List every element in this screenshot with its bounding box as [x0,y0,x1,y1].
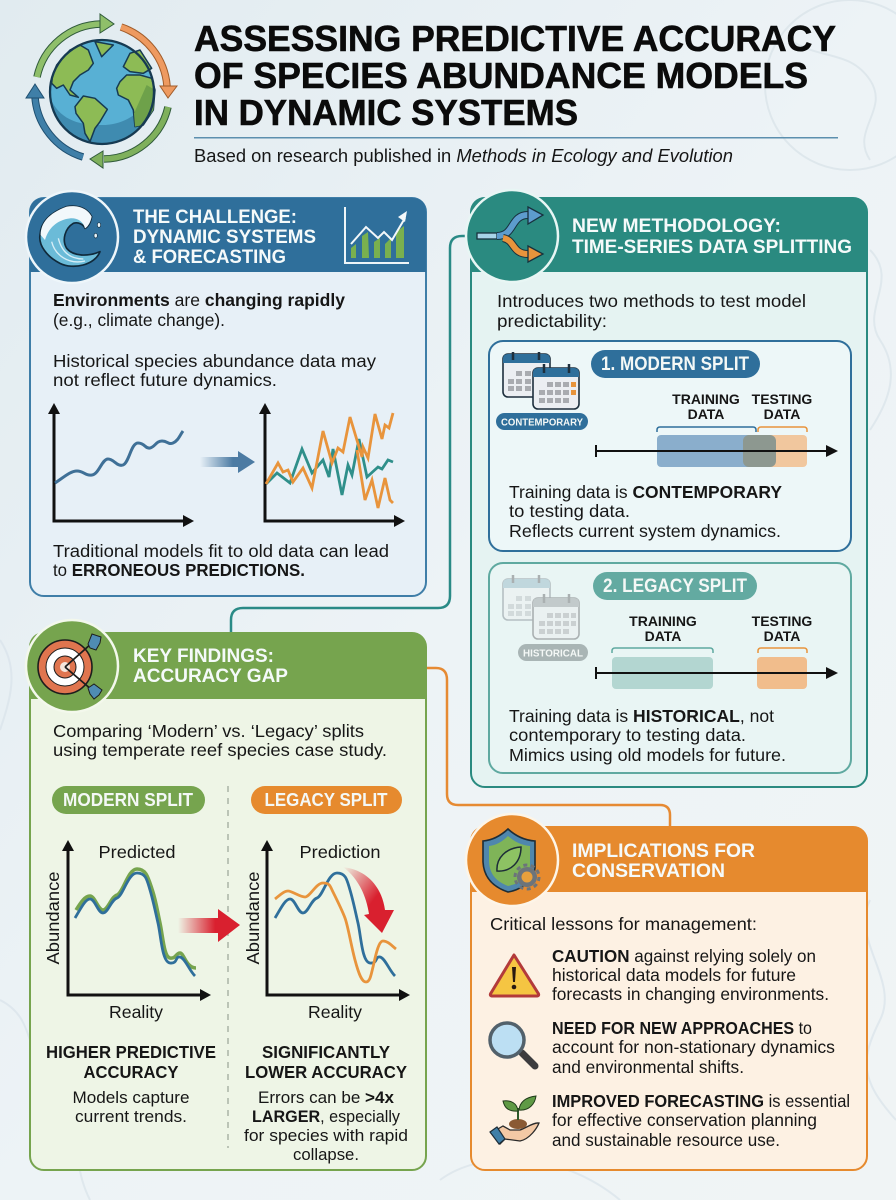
methodology intro: predictability: [497,311,607,331]
legacy split pill [593,572,757,600]
challenge heading [133,206,316,268]
abundance label: Abundance [43,872,63,964]
arrow: modern to legacy [178,909,240,942]
icon: warning triangle [490,955,539,996]
challenge conclusion: to ERRONEOUS PREDICTIONS. [53,560,305,580]
connector: findings to implications [426,668,670,828]
legacy split pill: LEGACY SPLIT [264,790,388,810]
modern split pill: 1. MODERN SPLIT [601,354,749,375]
modern outcome text: Models capture [72,1089,190,1107]
caution text: historical data models for future [552,965,796,985]
findings heading: KEY FINDINGS: [133,645,274,667]
modern split text: to testing data. [509,501,630,521]
historical label: HISTORICAL [523,648,584,660]
implications icon: shield [466,814,558,906]
chart: volatile trend [259,403,405,527]
challenge header [30,198,426,272]
connector: challenge to methodology to findings [231,236,466,634]
modern outcome text: HIGHER PREDICTIVE [46,1042,216,1062]
title: OF SPECIES ABUNDANCE MODELS [194,55,808,96]
caution text: CAUTION against relying solely on [552,946,816,966]
icon: magnifying glass [490,1023,535,1066]
panel: key findings [26,620,426,1170]
challenge text: (e.g., climate change). [53,310,225,330]
challenge icon: wave [26,191,118,283]
legacy outcome text: LARGER, especially [252,1108,401,1126]
chart: stable trend [48,403,194,527]
legacy split pill [251,786,402,814]
challenge text: Historical species abundance data may [53,351,376,371]
challenge text: not reflect future dynamics. [53,370,277,390]
caution text: forecasts in changing environments. [552,984,829,1004]
improved forecasting text: and sustainable resource use. [552,1130,780,1150]
challenge conclusion: Traditional models fit to old data can lead [53,541,389,561]
legacy split text: Mimics using old models for future. [509,745,786,765]
modern split text: Reflects current system dynamics. [509,521,781,541]
findings heading: ACCURACY GAP [133,665,288,687]
icon: contemporary calendars [503,352,579,409]
methodology icon: split arrows [466,190,558,282]
legacy split timeline [596,613,838,689]
legacy outcome text [244,1042,408,1164]
findings heading [133,645,288,687]
legacy outcome text: Errors can be >4x [258,1089,395,1107]
modern outcome text [46,1042,216,1126]
legacy split timeline: DATA [764,628,800,644]
legacy outcome text: for species with rapid [244,1127,408,1145]
challenge text [53,290,376,390]
methodology heading [572,215,852,258]
modern split timeline: TRAINING [672,391,740,407]
reality label: Reality [308,1002,362,1022]
modern split pill: MODERN SPLIT [63,790,193,810]
new approaches text [552,1018,835,1077]
legacy split pill: 2. LEGACY SPLIT [603,576,747,597]
legacy split text: contemporary to testing data. [509,725,746,745]
reality label: Reality [109,1002,163,1022]
prediction label: Prediction [300,842,380,862]
methodology heading: TIME-SERIES DATA SPLITTING [572,236,852,258]
icon: historical calendars [503,575,579,639]
legacy split timeline: DATA [645,628,681,644]
chart: legacy split [243,840,410,1022]
findings intro [53,721,387,760]
improved forecasting text [552,1091,850,1150]
methodology intro [497,291,806,331]
modern outcome text: ACCURACY [84,1062,179,1082]
modern split timeline: DATA [688,406,724,422]
panel: new methodology [466,190,867,787]
modern split pill [591,350,760,378]
methodology header [471,198,867,272]
icon: globe with cycle arrows [26,14,177,168]
legacy outcome text: LOWER ACCURACY [245,1062,407,1082]
legacy outcome text: collapse. [293,1146,359,1164]
methodology intro: Introduces two methods to test model [497,291,806,311]
caution text [552,946,829,1004]
new approaches text: NEED FOR NEW APPROACHES to [552,1018,812,1038]
challenge conclusion [53,541,389,580]
chart: modern split [43,840,211,1022]
findings header [30,633,426,699]
title [194,18,836,133]
implications header [471,827,867,892]
modern split timeline: DATA [764,406,800,422]
improved forecasting text: IMPROVED FORECASTING is essential [552,1091,850,1111]
findings intro: Comparing ‘Modern’ vs. ‘Legacy’ splits [53,721,364,741]
findings icon: target [26,620,118,712]
implications heading [572,840,755,882]
challenge heading: THE CHALLENGE: [133,206,297,228]
arrow: trend to volatile [200,451,255,473]
improved forecasting text: for effective conservation planning [552,1110,817,1130]
curved red arrow [343,867,394,933]
implications heading: CONSERVATION [572,860,725,882]
modern split text [509,482,782,541]
panel: implications [466,814,867,1170]
modern split pill [52,786,205,814]
contemporary label: CONTEMPORARY [501,416,583,428]
title: ASSESSING PREDICTIVE ACCURACY [194,18,836,59]
legacy split timeline: TRAINING [629,613,697,629]
modern split timeline: TESTING [752,391,812,407]
title: IN DYNAMIC SYSTEMS [194,92,578,133]
modern split timeline [596,391,838,467]
subtitle: Based on research published in Methods in Ecology and Evolution [194,146,733,166]
icon: growth chart [345,207,409,263]
challenge heading: & FORECASTING [133,246,286,268]
sub-panel: legacy split [489,563,851,773]
methodology heading: NEW METHODOLOGY: [572,215,781,237]
panel: the challenge [26,191,426,596]
contemporary label [496,413,588,430]
sub-panel: modern split [489,341,851,551]
findings intro: using temperate reef species case study. [53,740,387,760]
legacy split text [509,706,786,765]
implications heading: IMPLICATIONS FOR [572,840,755,862]
challenge heading: DYNAMIC SYSTEMS [133,226,316,248]
modern outcome text: current trends. [75,1108,187,1126]
legacy outcome text: SIGNIFICANTLY [262,1042,390,1062]
challenge text: Environments are changing rapidly [53,290,345,310]
predicted label: Predicted [98,842,176,862]
icon: hand with seedling [490,1096,539,1144]
implications intro: Critical lessons for management: [490,914,757,934]
legacy split text: Training data is HISTORICAL, not [509,706,774,726]
historical label [518,644,588,661]
modern split text: Training data is CONTEMPORARY [509,482,782,502]
legacy split timeline: TESTING [752,613,812,629]
abundance label: Abundance [243,872,263,964]
new approaches text: and environmental shifts. [552,1057,744,1077]
new approaches text: account for non-stationary dynamics [552,1037,835,1057]
